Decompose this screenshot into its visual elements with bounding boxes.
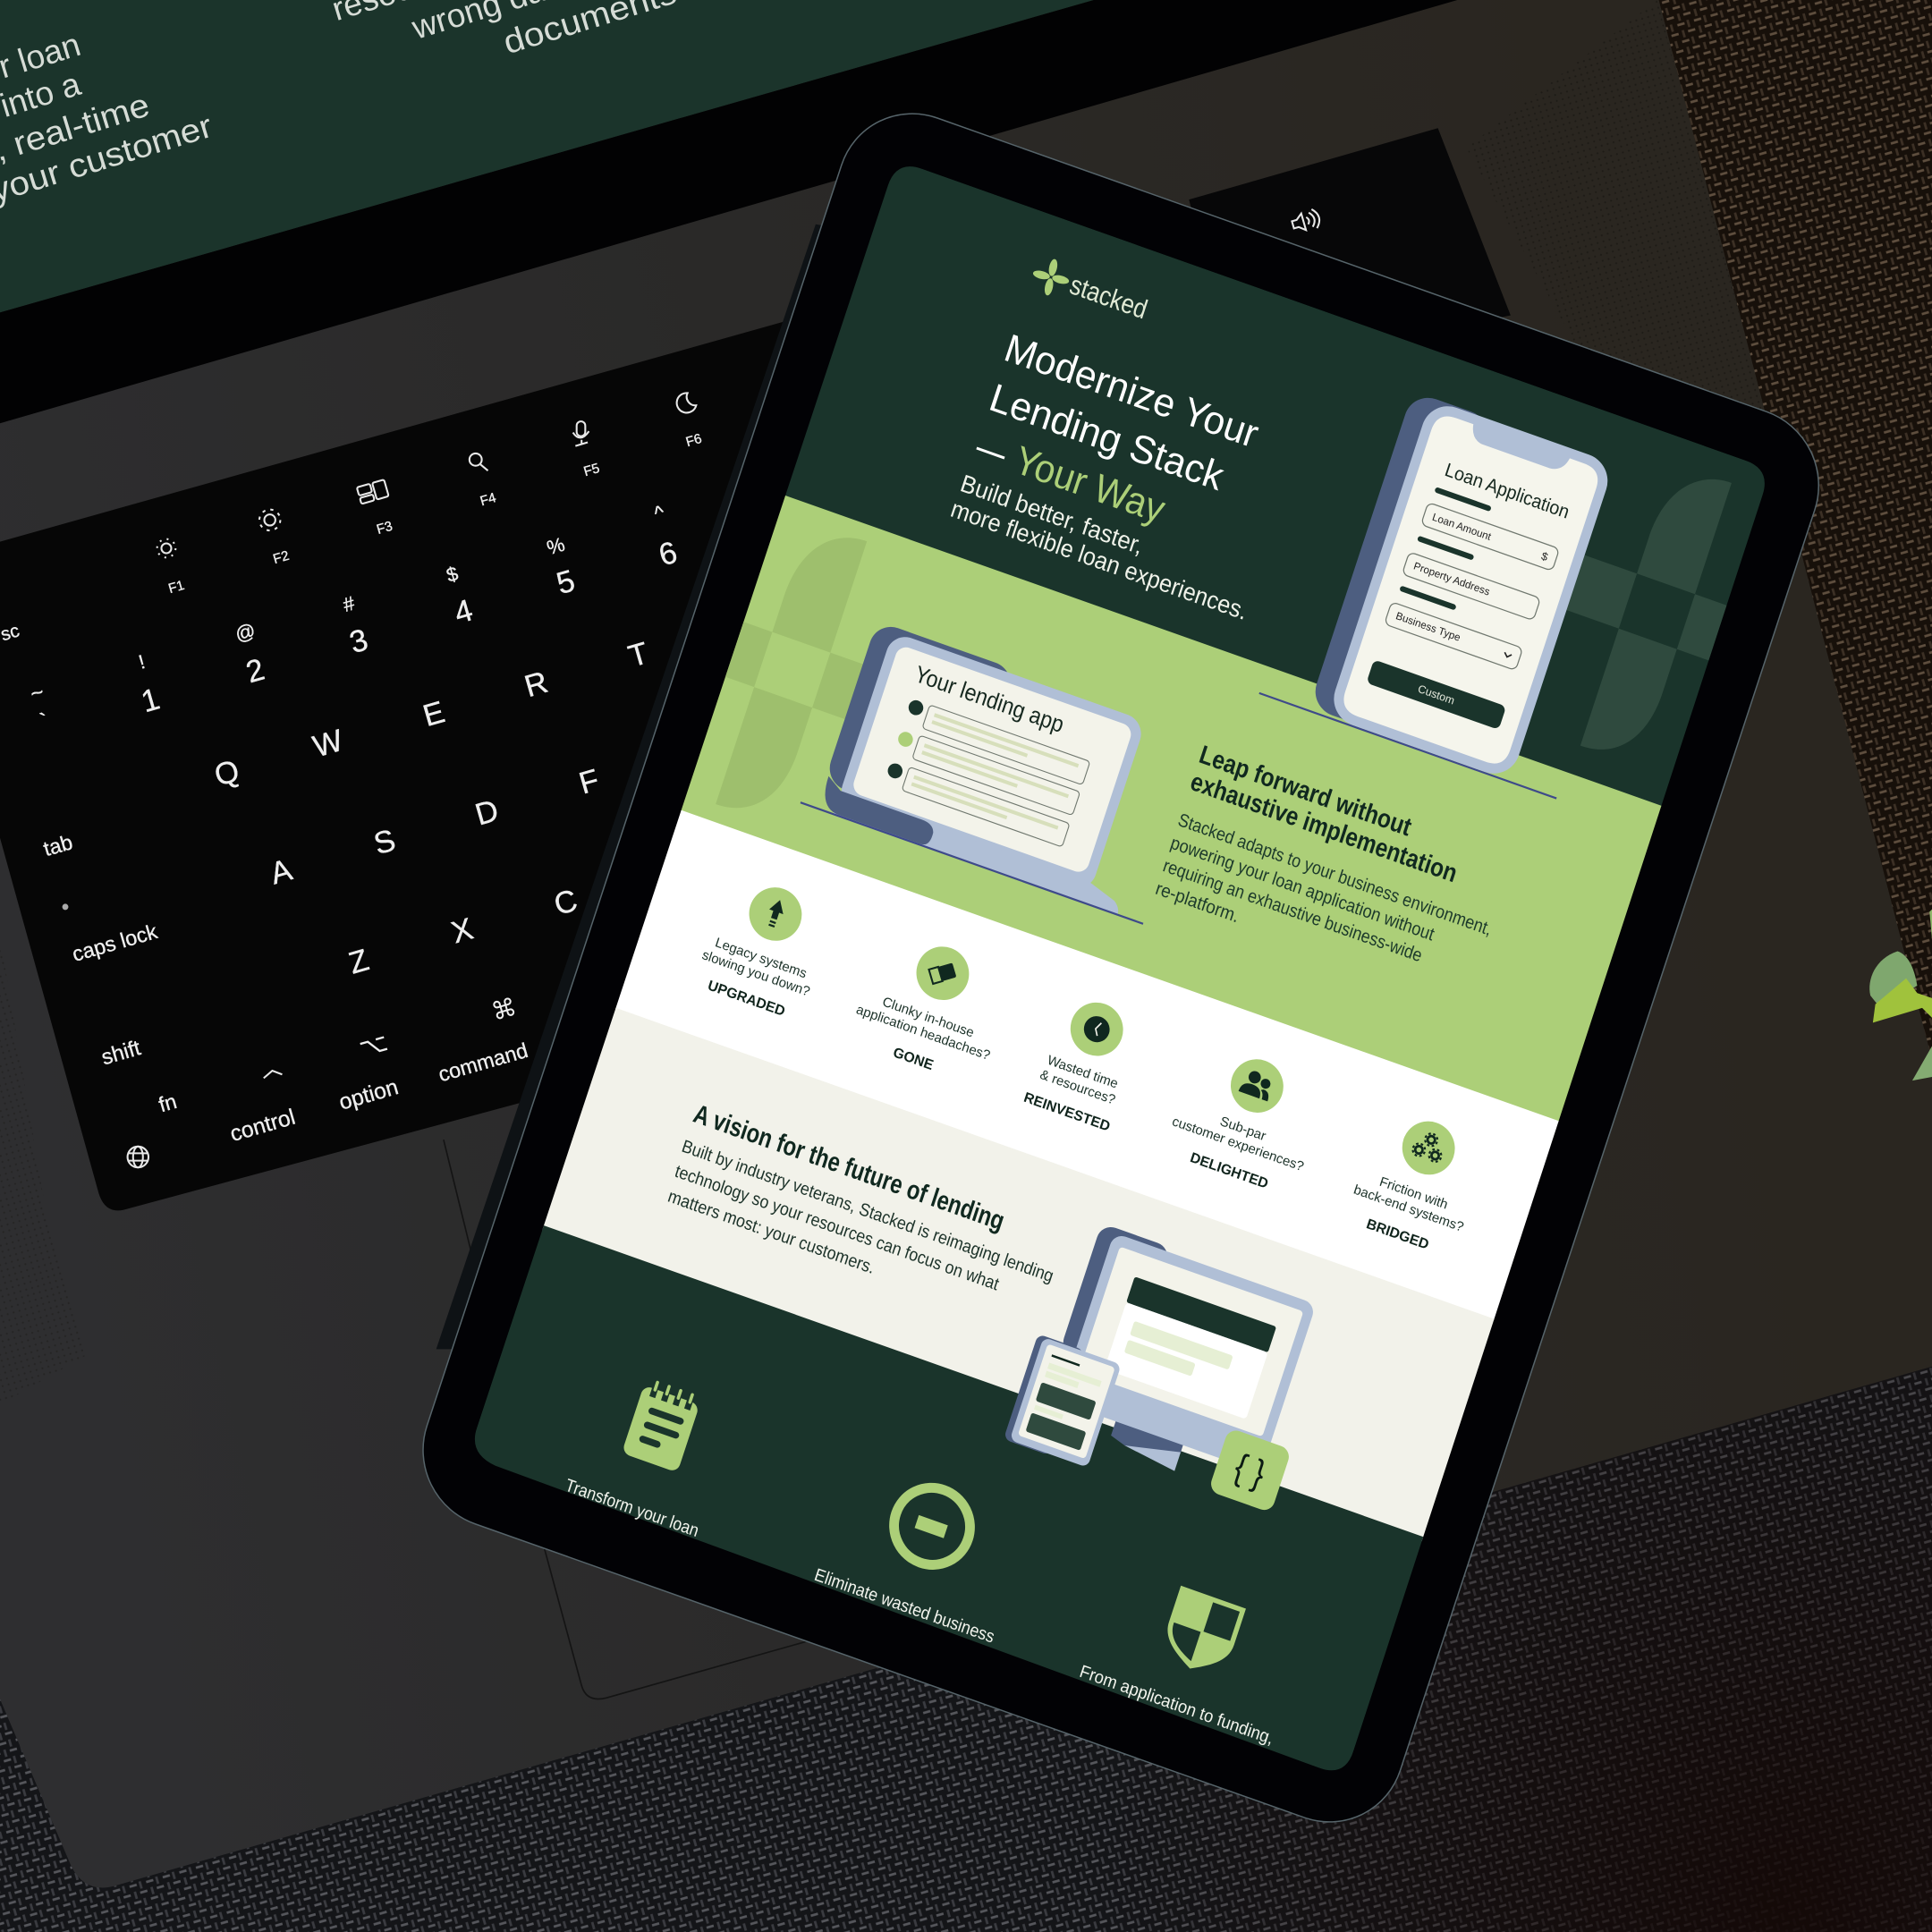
tablet cover shadow strip [436,225,844,1349]
benefit: gone: application headaches? [854,1002,992,1063]
benefit: upgraded [691,870,837,1025]
letter keys: C [550,884,581,922]
number row keys: 4 [451,593,477,631]
laptop ground line [801,801,1143,925]
letter keys [211,636,652,981]
number row keys: ` [38,709,52,734]
code brackets badge [1208,1428,1292,1513]
number row keys: ! [136,650,148,674]
benefit: bridged: back-end systems? [1352,1182,1465,1235]
section paragraph: leap forward [1153,809,1495,1008]
laptop illustration: Your lending app [911,660,1067,738]
icon: gears [1411,1129,1447,1164]
benefit: reinvested: & resources? [1038,1067,1117,1108]
code brackets badge: { } [1230,1445,1270,1495]
decorative checker pattern green [716,538,867,808]
number row keys [0,501,681,734]
main title [976,335,1259,527]
modifier keys: ⌥ [356,1028,391,1063]
caption: transform: Transform your loan [563,1476,701,1541]
number row keys: % [544,533,567,559]
section heading: vision: A vision for the future of lending [690,1099,1008,1236]
laptop screen text left [0,25,216,209]
icon: speaker key [1290,208,1322,234]
section paragraph: vision: Built by industry veterans, Stacked is reimaging lending [679,1137,1056,1286]
benefit: delighted [1161,1038,1331,1201]
letter keys: D [471,793,503,833]
plant leaves [1869,910,1932,1080]
section paragraph: leap forward: requiring an exhaustive business-wide [1160,855,1425,966]
laptop touch strip area [1189,128,1511,369]
section heading: leap forward [1187,741,1470,888]
benefit: gone: GONE [891,1045,936,1073]
benefit: reinvested [1021,988,1146,1135]
icon: eraser [928,962,956,984]
number row keys: 3 [346,623,372,660]
trackpad outline [444,1140,838,1699]
modifier keys [41,830,530,1167]
function keys: F1 [166,578,186,597]
tablet screen [438,148,1796,1791]
letter keys: F [575,763,603,801]
number row keys: 1 [138,682,164,719]
decorative checker pattern dark [1567,479,1732,750]
icon: up arrow [765,898,787,929]
letter keys: R [521,665,552,704]
white band [601,805,1565,1322]
benefit: bridged: Friction with [1377,1174,1450,1213]
screen background top section [769,152,1780,809]
modifier keys: ⌘ [488,993,520,1027]
letter keys: X [448,912,477,950]
letter keys: E [419,695,448,733]
phone illustration: Property Address [1412,560,1491,598]
modifier keys: tab [41,830,75,860]
section paragraph: vision: technology so your resources can focus on what [673,1162,1002,1295]
benefit: upgraded: UPGRADED [706,979,787,1020]
number row keys: 5 [553,564,579,601]
laptop screen [0,0,1115,314]
letter keys: S [370,823,399,861]
modifier keys: command [436,1038,530,1086]
main title: Your Way [1009,438,1170,532]
caption: from application: From application to funding, [1077,1662,1276,1749]
benefit: delighted: Sub-par [1218,1114,1267,1144]
benefit: bridged [1343,1104,1491,1262]
benefit: upgraded: Legacy systems [713,935,809,981]
phone illustration: Custom [1416,682,1456,708]
keyboard [0,320,789,1210]
function keys: F3 [375,519,394,538]
modifier keys: fn [156,1089,179,1116]
benefit: gone: Clunky in-house [880,995,976,1041]
benefit: reinvested: Wasted time [1046,1053,1120,1092]
letter keys: W [309,724,347,764]
small tablet illustration [1004,1334,1122,1469]
number row keys: ^ [652,501,667,525]
benefit: upgraded: slowing you down? [700,947,812,1000]
icon: people [1239,1068,1275,1101]
section paragraph: leap forward: re-platform. [1153,878,1241,927]
tablet body [403,93,1839,1843]
benefit: reinvested: REINVESTED [1021,1090,1112,1135]
function keys: F2 [271,548,291,567]
number row keys: 2 [242,652,268,690]
section paragraph: vision: matters most: your customers. [665,1187,877,1278]
benefit: delighted: DELIGHTED [1188,1150,1270,1192]
benefit: gone [845,925,1017,1090]
laptop illustration [825,626,1141,914]
letter keys: A [267,853,296,891]
function keys [157,393,704,597]
function keys: F5 [582,461,601,479]
number row keys: $ [444,562,461,587]
icon: minus circle [884,1478,980,1575]
modifier keys: control [227,1106,298,1147]
main title: Lending Stack [984,376,1230,499]
benefit: bridged: BRIDGED [1364,1216,1430,1253]
laptop bezel [0,0,1479,425]
phone illustration: Loan Application [1442,459,1572,523]
phone illustration: Loan Amount [1431,512,1493,543]
monitor illustration [1037,1223,1318,1498]
section paragraph: leap forward: Stacked adapts to your business environment, [1175,809,1495,940]
green band [665,490,1669,1124]
logo mark [1033,259,1070,295]
cream band [528,1003,1500,1544]
icon: notebook [622,1377,702,1472]
letter keys: Q [211,754,243,793]
modifier keys: option [336,1075,401,1115]
laptop screen text right [327,0,681,61]
phone illustration: $ [1539,550,1549,564]
logo [1033,259,1148,318]
bottom dark band [449,1220,1428,1784]
modifier keys: shift [98,1036,144,1070]
section paragraph: leap forward: powering your loan application without [1168,833,1437,945]
icon: clock [1080,1013,1113,1046]
subtitle: Build better, faster, [957,469,1147,560]
modifier keys: caps lock [70,919,160,966]
tablet [403,93,1839,1843]
caption: eliminate: Eliminate wasted business [812,1565,997,1648]
function keys: F4 [479,490,498,509]
phone ground line [1258,692,1557,800]
section heading: leap forward: exhaustive implementation [1187,767,1461,888]
number row keys: @ [233,619,258,646]
number row keys: # [341,591,358,616]
icon: shield [1157,1586,1246,1680]
phone illustration: Business Type [1394,610,1462,644]
number row keys: ~ [28,680,47,707]
number row keys: 6 [655,536,681,572]
subtitle: more flexible loan experiences. [947,495,1251,625]
main title: — [970,425,1013,476]
phone illustration [1309,391,1615,781]
main title: Modernize Your [999,326,1264,456]
logo: stacked [1066,270,1151,325]
letter keys: Z [345,943,373,981]
letter keys: T [625,636,652,674]
benefit: delighted: customer experiences? [1170,1114,1306,1174]
section heading: leap forward: Leap forward without [1196,741,1415,843]
function keys: F6 [684,431,704,450]
